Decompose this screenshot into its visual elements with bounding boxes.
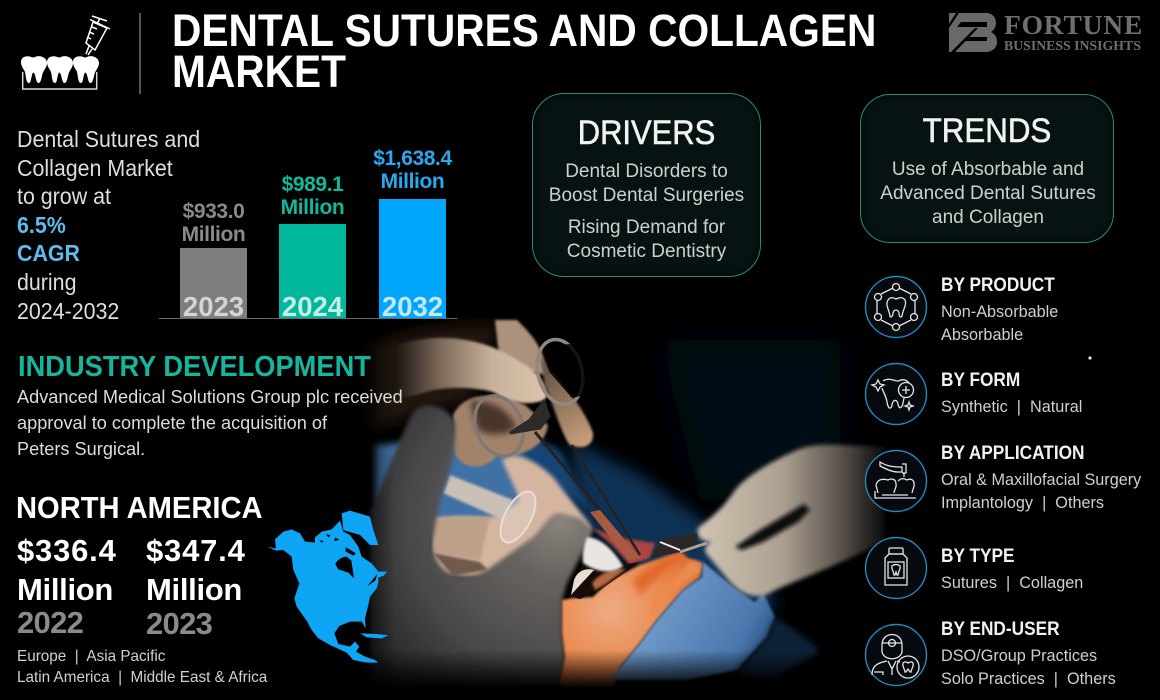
trend text: Advanced Dental Sutures: [880, 183, 1096, 204]
logo mark: [949, 13, 997, 52]
bar chart: market size: [159, 147, 457, 322]
text block: industry development: Peters Surgical.: [17, 438, 145, 459]
panel: drivers: [532, 93, 761, 277]
segment: by application: [941, 442, 1142, 512]
text block: CAGR statement: CAGR: [17, 240, 80, 266]
value label 2032: $1,638.4: [373, 147, 452, 170]
heading: industry development: INDUSTRY DEVELOPMENT: [18, 351, 371, 383]
stat: 2022: Million: [17, 572, 113, 606]
header divider: [139, 13, 140, 94]
text block: CAGR statement: 6.5%: [17, 212, 66, 238]
text block: other regions: Europe | Asia Pacific: [17, 648, 165, 665]
value label 2023: [182, 200, 245, 246]
segment: by end-user: DSO/Group Practices: [941, 646, 1097, 665]
trend text: and Collagen: [932, 207, 1044, 228]
segment: by product: [941, 274, 1058, 344]
year label 2024: 2024: [282, 291, 343, 322]
icon: tooth network: [864, 276, 928, 338]
left glove: [370, 406, 593, 700]
driver text: Dental Disorders to: [565, 161, 728, 182]
text block: CAGR statement: to grow at: [17, 183, 111, 209]
segment: by product: Non-Absorbable: [941, 302, 1058, 321]
panel: trends: [860, 94, 1114, 243]
segment: by application: Oral & Maxillofacial Surgery: [941, 470, 1141, 489]
value label 2032: [373, 147, 452, 193]
trend text: Use of Absorbable and: [892, 159, 1084, 180]
bar 2023: [180, 248, 247, 319]
value label 2024: Million: [281, 196, 344, 218]
heading: North America: NORTH AMERICA: [16, 490, 263, 525]
year label 2023: 2023: [183, 291, 244, 322]
segment: by type: [941, 545, 1083, 592]
text block: other regions: [17, 648, 268, 686]
segment: by type: Sutures | Collagen: [941, 573, 1083, 592]
icon: dentist: [864, 624, 928, 686]
trend text: [880, 159, 1096, 228]
forceps and tool: [650, 533, 698, 558]
year label 2032: 2032: [382, 291, 443, 322]
segment: by end-user: BY END-USER: [941, 618, 1060, 640]
value label 2032: Million: [381, 170, 444, 193]
logo wordmark: FORTUNE: [1004, 9, 1143, 40]
segment: by type: BY TYPE: [941, 545, 1015, 567]
segment: by form: Synthetic | Natural: [941, 397, 1082, 416]
logo tagline: BUSINESS INSIGHTS: [1004, 38, 1141, 53]
text block: CAGR statement: Collagen Market: [17, 155, 173, 181]
icon: teeth and syringe: [21, 15, 110, 90]
value label 2023: $933.0: [183, 200, 244, 223]
logo: Fortune Business Insights: [949, 9, 1143, 53]
heading: trends: TRENDS: [923, 112, 1051, 150]
segment: by end-user: [941, 618, 1116, 688]
stat: 2022: 2022: [17, 605, 83, 640]
icon: bottle with tooth: [864, 536, 928, 600]
heading: drivers: DRIVERS: [578, 114, 715, 152]
segment: by form: BY FORM: [941, 369, 1020, 391]
tube and cup: [443, 475, 513, 520]
text block: industry development: [17, 386, 403, 459]
axis line: [159, 318, 457, 319]
driver text: Boost Dental Surgeries Rising Demand for: [549, 185, 744, 238]
driver text: Cosmetic Dentistry: [567, 241, 726, 262]
text block: CAGR statement: during: [17, 269, 76, 295]
value label 2023: Million: [182, 223, 245, 246]
right hand: [698, 445, 885, 596]
value label 2024: [281, 173, 344, 218]
pink fingers in hole: [430, 456, 592, 580]
stat: 2023: Million: [146, 572, 242, 606]
face: [556, 552, 702, 700]
stat: 2022: $336.4: [17, 533, 117, 568]
text block: industry development: approval to complete the acquisition of: [17, 412, 327, 433]
stat: 2023: $347.4: [146, 533, 246, 568]
text block: other regions: Latin America | Middle East & Africa: [17, 669, 267, 686]
title: MARKET: [172, 46, 346, 97]
upper hand: [370, 324, 500, 430]
dark blue backdrop: [660, 340, 840, 500]
icon: dental drill on teeth: [864, 450, 928, 512]
text block: CAGR statement: Dental Sutures and: [17, 126, 200, 152]
mouth and teeth: [592, 528, 655, 565]
text block: CAGR statement: [17, 126, 200, 324]
stat: 2023: [146, 533, 246, 641]
stat: 2022: [17, 533, 117, 640]
text block: CAGR statement: 2024-2032: [17, 298, 119, 324]
value label 2024: $989.1: [282, 173, 343, 196]
title: [172, 5, 876, 97]
driver text: [549, 161, 744, 262]
title: DENTAL SUTURES AND COLLAGEN: [172, 5, 876, 56]
text block: industry development: Advanced Medical Solutions Group plc received: [17, 386, 403, 407]
icon: tooth with plus: [864, 362, 928, 426]
segment: by product: BY PRODUCT: [941, 274, 1055, 296]
segment: by form: [941, 369, 1082, 416]
segment: by end-user: Solo Practices | Others: [941, 669, 1116, 688]
segment: by product: Absorbable: [941, 325, 1023, 344]
segment: by application: BY APPLICATION: [941, 442, 1085, 464]
stat: 2023: 2023: [146, 606, 212, 641]
drape: [610, 562, 775, 680]
bar 2024: [279, 224, 346, 319]
bar 2032: [379, 199, 446, 319]
segment: by application: Implantology | Others: [941, 493, 1104, 512]
map: North America: [268, 510, 388, 663]
